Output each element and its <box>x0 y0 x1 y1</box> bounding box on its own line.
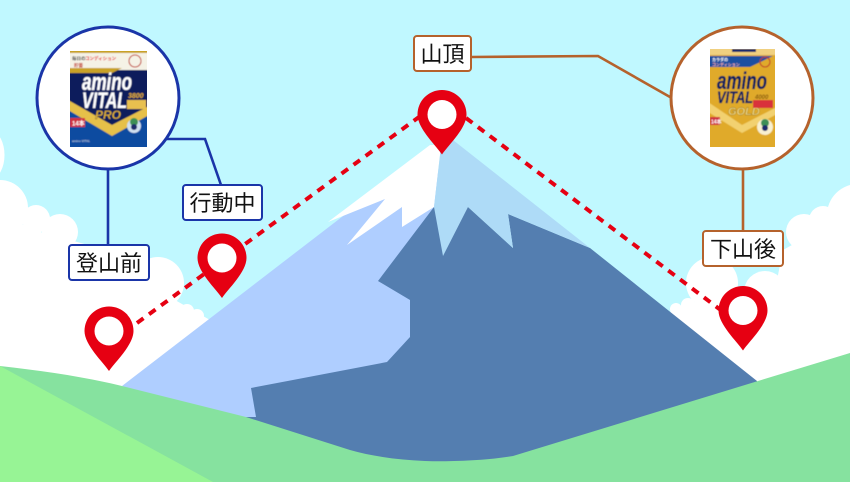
snow cap white <box>328 145 440 245</box>
product box: amino VITAL GOLD: カラダの <box>712 56 728 62</box>
product box: amino VITAL PRO: 14本 <box>72 120 85 128</box>
product box: amino VITAL PRO <box>68 49 149 149</box>
connector: after descent to gold product <box>742 170 744 231</box>
label: 下山後 <box>703 231 783 266</box>
product box: amino VITAL PRO: amino <box>82 69 132 96</box>
dashed route up <box>137 117 419 323</box>
mountain dark blue right face <box>246 207 760 475</box>
product box: amino VITAL PRO: 3800 <box>128 93 144 100</box>
label: 登山前 <box>69 245 149 280</box>
connector: summit to gold product <box>471 56 670 97</box>
ground: front hill <box>0 366 213 482</box>
product box: amino VITAL PRO: 貯蓄 <box>74 62 83 69</box>
product box: amino VITAL GOLD: コンディション <box>712 61 740 67</box>
label: 山頂: 山頂 <box>420 42 465 67</box>
map pin: after descent <box>718 286 768 350</box>
product box: amino VITAL GOLD: GOLD <box>728 106 760 118</box>
product box: amino VITAL GOLD: 4000 <box>754 95 769 101</box>
left clouds <box>0 132 210 400</box>
product box: amino VITAL GOLD: VITAL <box>717 88 753 107</box>
snow cap light blue <box>434 140 590 256</box>
product box: amino VITAL PRO: 毎日の <box>72 55 86 62</box>
label: 行動中: 行動中 <box>189 191 256 216</box>
product box: amino VITAL PRO: amino VITAL <box>72 139 90 143</box>
product box: amino VITAL PRO: コンディション <box>85 55 117 62</box>
map pin: during activity <box>198 234 246 298</box>
map pin: before climb <box>84 306 134 371</box>
connector: before climb to product <box>107 170 109 245</box>
mountain <box>122 140 760 475</box>
product box: amino VITAL PRO: VITAL <box>82 88 127 113</box>
product circle: amino VITAL GOLD <box>671 27 813 169</box>
label: 下山後: 下山後 <box>710 237 776 262</box>
product circle: amino VITAL PRO <box>37 27 179 169</box>
label: 山頂 <box>414 36 471 71</box>
product box: amino VITAL PRO: PRO <box>95 108 122 122</box>
label: 行動中 <box>183 185 262 220</box>
product box: amino VITAL GOLD <box>708 47 777 149</box>
connector: during activity to product <box>167 139 221 185</box>
product box: amino VITAL GOLD: 14本 <box>711 118 722 126</box>
right clouds <box>670 184 850 400</box>
product box: amino VITAL GOLD: amino <box>717 68 767 95</box>
ground: rear hill <box>0 353 850 482</box>
map pin: summit <box>418 90 466 154</box>
label: 登山前: 登山前 <box>76 251 142 276</box>
mountain light blue left face <box>122 143 440 430</box>
dashed route down <box>466 118 722 311</box>
